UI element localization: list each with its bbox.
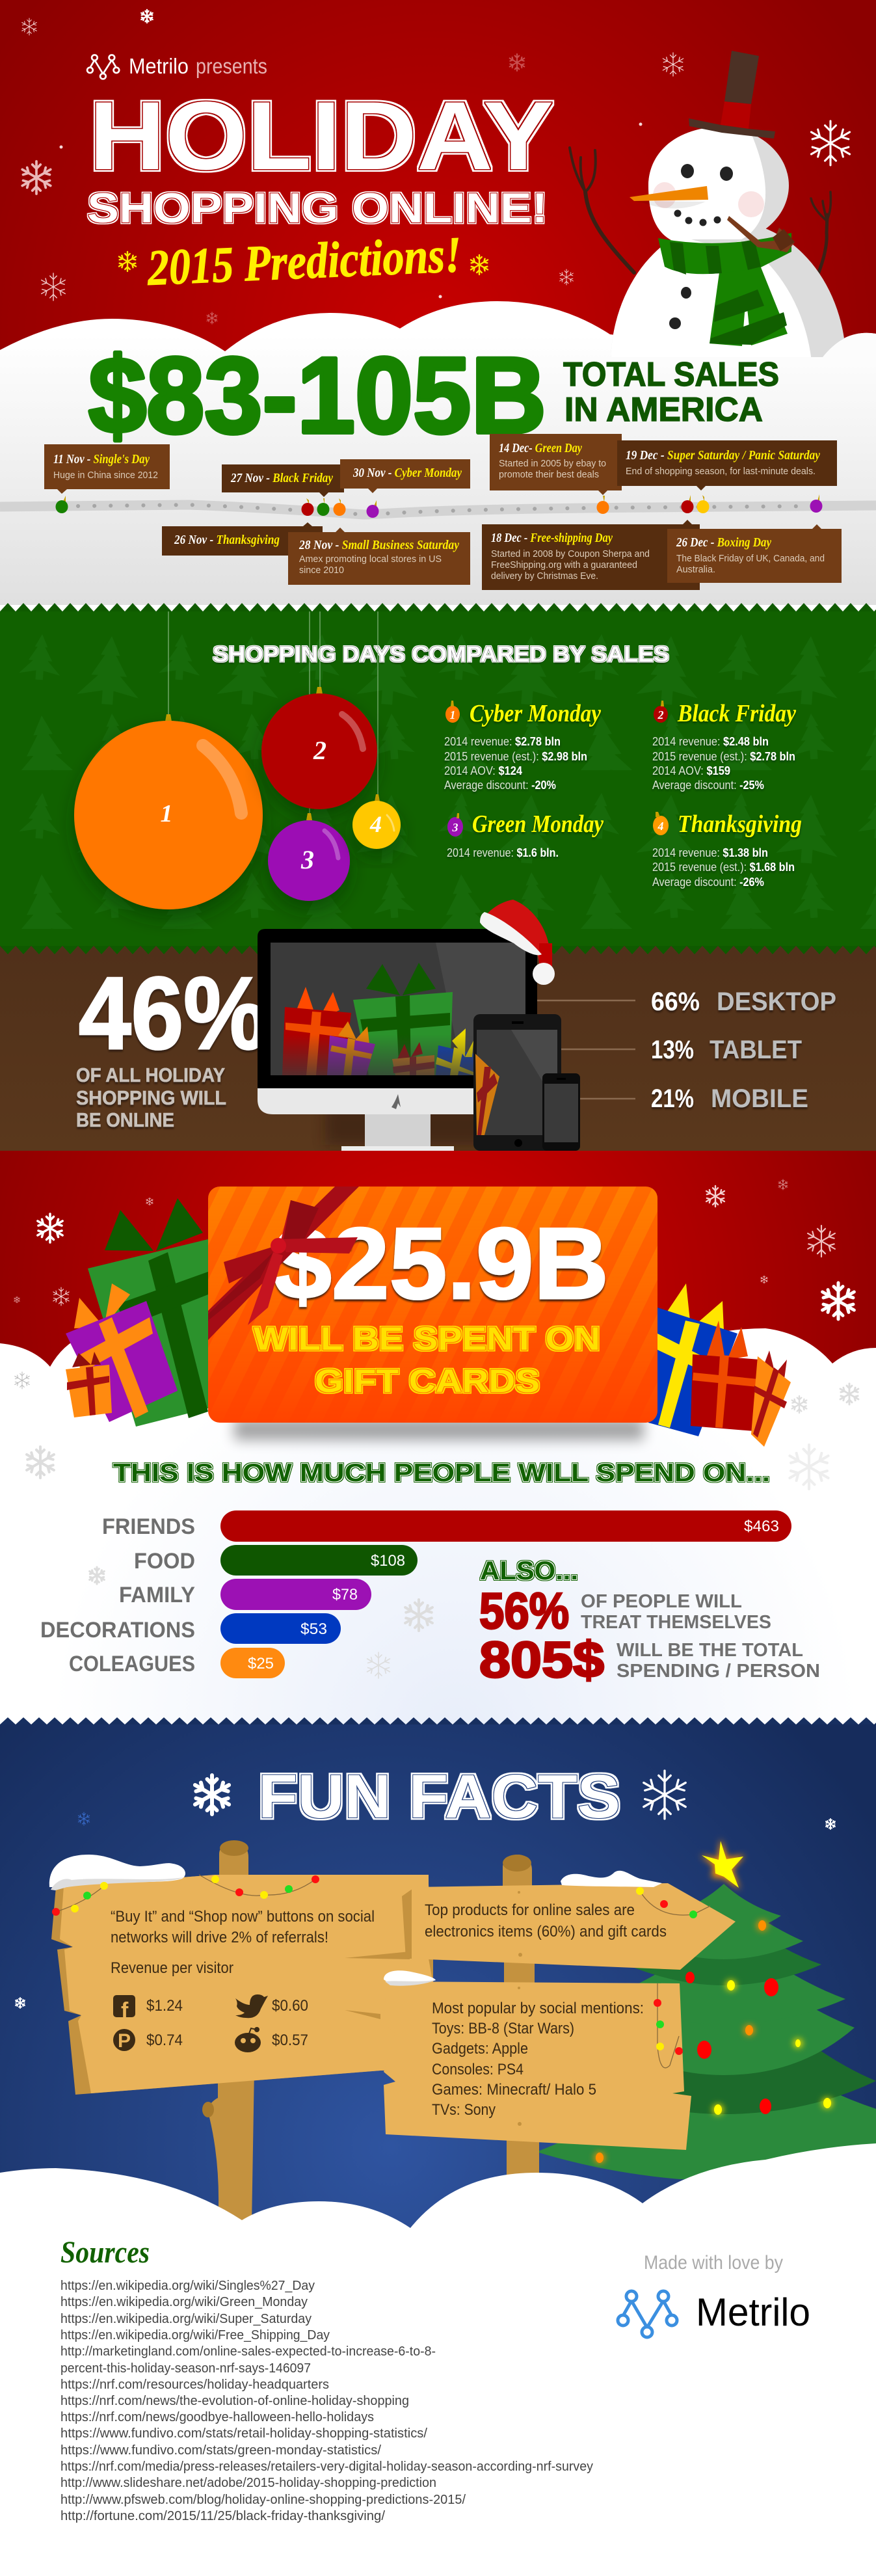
string lights on signs <box>52 1875 710 2068</box>
stat caption: of all holiday shopping will be online <box>76 1064 226 1131</box>
sign: most popular by social mentions: Gadgets: Apple <box>432 2040 528 2058</box>
callout: also 56% and 805$: 56% <box>479 1582 569 1639</box>
sign: social buttons: networks will drive 2% of referrals! <box>111 1929 328 1946</box>
sources list: https://en.wikipedia.org/wiki/Free_Shipping_Day <box>60 2328 330 2342</box>
headline: will be spent on gift cards: WILL BE SPENT ON <box>254 1321 600 1357</box>
callout: 11 Nov Single's Day <box>44 444 170 494</box>
sources list <box>60 2279 593 2523</box>
headline: total sales in America <box>563 356 779 429</box>
background: white spending section with snow <box>0 1328 876 1730</box>
callout: also 56% and 805$: WILL BE THE TOTAL <box>617 1640 803 1661</box>
legend: Black Friday: 2014 AOV: $159 <box>652 764 730 777</box>
ornament 4 <box>352 794 401 849</box>
sources list: https://www.fundivo.com/stats/retail-holiday-shopping-statistics/ <box>60 2426 427 2441</box>
callout: 14 Dec Green Day: 14 Dec- Green Day <box>499 441 582 455</box>
bar chart: spending per category: $25 <box>248 1655 274 1672</box>
callout: 27 Nov Black Friday: 27 Nov - Black Friday <box>230 471 333 485</box>
stat: 46%: 46% <box>79 956 267 1071</box>
legend: Black Friday: Average discount: -25% <box>652 779 764 792</box>
sources list: https://en.wikipedia.org/wiki/Super_Saturday <box>60 2312 312 2326</box>
logo: Metrilo presents: presents <box>196 54 267 78</box>
legend: Black Friday: 2 <box>657 708 663 721</box>
legend: Cyber Monday: 1 <box>450 708 455 721</box>
sign: most popular by social mentions: Toys: BB-8 (Star Wars) <box>432 2020 574 2037</box>
legend: Cyber Monday <box>444 700 601 792</box>
gifts: left stack <box>66 1198 208 1427</box>
legend: Black Friday: Black Friday <box>677 700 796 727</box>
callout: 26 Nov Thanksgiving: 26 Nov - Thanksgiving <box>174 533 280 547</box>
sign: most popular by social mentions <box>384 1981 691 2150</box>
sign: most popular by social mentions: TVs: Sony <box>432 2101 496 2119</box>
legend: Thanksgiving <box>652 811 802 889</box>
sign: social buttons: $1.24 <box>146 1997 183 2015</box>
legend: Green Monday: Green Monday <box>472 811 604 838</box>
sign: social buttons: $0.57 <box>272 2032 308 2049</box>
stat caption: of all holiday shopping will be online: OF ALL HOLIDAY <box>76 1064 225 1086</box>
device share: 66% desktop: 66% <box>651 987 700 1016</box>
device share: 21% mobile: MOBILE <box>711 1084 808 1113</box>
sign: most popular by social mentions: Games: Minecraft/ Halo 5 <box>432 2081 596 2099</box>
sources list: http://www.pfsweb.com/blog/holiday-online-shopping-predictions-2015/ <box>60 2493 466 2507</box>
sign: social buttons: “Buy It” and “Shop now” buttons on social <box>111 1908 375 1925</box>
gifts: right stack <box>648 1283 791 1447</box>
sources list: https://nrf.com/resources/holiday-headquarters <box>60 2378 329 2392</box>
callout: 30 Nov Cyber Monday: 30 Nov - Cyber Monday <box>352 466 462 480</box>
bar chart: spending per category: FRIENDS <box>102 1514 195 1539</box>
sources list: http://www.slideshare.net/adobe/2015-holiday-shopping-prediction <box>60 2476 436 2490</box>
bar chart: spending per category: FAMILY <box>119 1583 195 1607</box>
bar chart: spending per category: $108 <box>371 1552 405 1570</box>
background: brown devices section <box>0 946 876 1151</box>
headline: will be spent on gift cards: GIFT CARDS <box>315 1363 540 1399</box>
ornament 1: 1 <box>160 800 173 827</box>
legend: Green Monday <box>447 811 604 859</box>
background: green ornaments section <box>0 603 876 954</box>
device share: 66% desktop: DESKTOP <box>717 987 836 1016</box>
tree lights <box>594 1920 832 2163</box>
sign: social buttons <box>51 1875 433 2095</box>
callout: 26 Dec Boxing Day: The Black Friday of UK, Canada, and <box>676 553 825 564</box>
device share: 21% mobile <box>651 1084 808 1113</box>
background: fun facts blue section <box>0 1717 876 2245</box>
title: SHOPPING ONLINE!: SHOPPING ONLINE! <box>87 184 548 232</box>
santa hat <box>480 900 555 985</box>
legend: Green Monday: 2014 revenue: $1.6 bln. <box>447 846 559 859</box>
callout: 18 Dec Free-shipping Day: FreeShipping.org with a guaranteed <box>491 559 637 570</box>
gift card panel <box>208 1187 657 1440</box>
sign: social buttons: $0.60 <box>272 1997 308 2015</box>
snowflakes: spending section <box>27 1445 829 1678</box>
callout: 30 Nov Cyber Monday <box>340 459 470 493</box>
device share: 13% tablet: 13% <box>651 1036 694 1064</box>
section title: this is how much people will spend on: THIS IS HOW MUCH PEOPLE WILL SPEND ON... <box>113 1459 770 1487</box>
device share: 66% desktop <box>651 987 836 1016</box>
legend: Cyber Monday: 2015 revenue (est.): $2.98 bln <box>444 750 587 763</box>
ornament 1 <box>74 714 263 909</box>
callout: 11 Nov Single's Day: Huge in China since 2012 <box>53 470 158 481</box>
callout: 26 Dec Boxing Day <box>667 524 842 583</box>
bar chart: spending per category: DECORATIONS <box>40 1618 195 1643</box>
tablet <box>473 1014 561 1151</box>
ornament 3: 3 <box>300 845 314 874</box>
logo: Metrilo presents <box>87 54 267 79</box>
sources list: http://fortune.com/2015/11/25/black-friday-thanksgiving/ <box>60 2509 385 2523</box>
background: timeline white section with snow drifts <box>0 301 876 605</box>
legend: Cyber Monday: 2014 AOV: $124 <box>444 764 522 777</box>
legend: Cyber Monday: 2014 revenue: $2.78 bln <box>444 735 561 748</box>
callout: 19 Dec Super Saturday <box>617 440 837 490</box>
section title: shopping days compared by sales: SHOPPING DAYS COMPARED BY SALES <box>213 642 669 667</box>
callout: also 56% and 805$: OF PEOPLE WILL <box>581 1591 742 1612</box>
callout: 28 Nov Small Business Saturday: since 2010 <box>299 565 344 576</box>
sources list: https://www.fundivo.com/stats/green-monday-statistics/ <box>60 2443 381 2458</box>
snowflakes: hero <box>22 10 850 324</box>
logo: Metrilo presents: Metrilo <box>129 54 189 78</box>
callout: 18 Dec Free-shipping Day: Started in 2008 by Coupon Sherpa and <box>491 548 650 559</box>
sign: social buttons: P <box>118 2030 131 2052</box>
callout: 27 Nov Black Friday <box>222 464 344 497</box>
ornament 3 <box>268 813 350 901</box>
legend: Thanksgiving: 2014 revenue: $1.38 bln <box>652 846 768 859</box>
stat caption: of all holiday shopping will be online: BE ONLINE <box>76 1108 174 1131</box>
christmas tree <box>537 1838 876 2179</box>
snow caps on signs <box>49 1855 662 1986</box>
sources list: https://nrf.com/news/goodbye-halloween-hello-holidays <box>60 2410 374 2424</box>
callout: 14 Dec Green Day: promote their best deals <box>499 469 599 480</box>
subtitle: 2015 Predictions!: 2015 Predictions! <box>146 226 462 296</box>
headline: $25.9B: $25.9B <box>274 1207 609 1321</box>
sign: top products arrow: electronics items (60%) and gift cards <box>425 1923 667 1940</box>
logo: Metrilo footer: Metrilo <box>696 2290 810 2334</box>
device share: 21% mobile: 21% <box>651 1084 694 1113</box>
legend: Thanksgiving: Average discount: -26% <box>652 876 764 889</box>
bar chart: spending per category <box>40 1510 791 1678</box>
callout: 18 Dec Free-shipping Day: delivery by Christmas Eve. <box>491 570 598 582</box>
sign: social buttons: $0.74 <box>146 2032 183 2049</box>
callout: also 56% and 805$: ALSO... <box>480 1557 578 1585</box>
section title: fun facts: FUN FACTS <box>258 1762 620 1831</box>
title: HOLIDAY: HOLIDAY <box>89 81 553 190</box>
made with love by: Made with love by <box>644 2252 783 2274</box>
ribbon bow on gift card <box>208 1187 359 1340</box>
callout: 28 Nov Small Business Saturday <box>288 528 470 585</box>
headline: $83-105B: $83-105B <box>88 336 546 456</box>
sign: most popular by social mentions: Most popular by social mentions: <box>432 2000 644 2017</box>
legend: Black Friday: 2015 revenue (est.): $2.78 bln <box>652 750 795 763</box>
snowflakes: blue section <box>16 1812 835 2008</box>
timeline band <box>0 505 876 515</box>
callout: 14 Dec Green Day: Started in 2005 by ebay to <box>499 458 606 469</box>
bar chart: spending per category: $53 <box>300 1620 327 1638</box>
callout: 26 Dec Boxing Day: Australia. <box>676 564 715 575</box>
callout: also 56% and 805$ <box>479 1557 820 1688</box>
snowflakes: gift section <box>14 1179 858 1413</box>
legend: Thanksgiving: 4 <box>657 820 663 833</box>
sign: top products arrow: Top products for online sales are <box>425 1901 635 1919</box>
headline: total sales in America: TOTAL SALES <box>563 356 779 394</box>
callout: 14 Dec Green Day <box>490 434 622 495</box>
sources heading: Sources <box>60 2235 150 2270</box>
monitor <box>258 929 537 1151</box>
bar chart: spending per category: FOOD <box>134 1549 195 1574</box>
callout: 18 Dec Free-shipping Day <box>482 520 700 590</box>
sources list: http://marketingland.com/online-sales-expected-to-increase-6-to-8- <box>60 2344 436 2359</box>
callout: 28 Nov Small Business Saturday: Amex promoting local stores in US <box>299 554 442 565</box>
signpost posts <box>202 1840 539 2225</box>
callout: 19 Dec Super Saturday: 19 Dec - Super Saturday / Panic Saturday <box>626 448 820 463</box>
logo: Metrilo footer <box>618 2290 810 2337</box>
callout: 11 Nov Single's Day: 11 Nov - Single's Day <box>53 452 150 466</box>
ornament 4: 4 <box>369 811 382 837</box>
sources list: https://nrf.com/media/press-releases/retailers-very-digital-holiday-season-according-nrf-survey <box>60 2460 593 2474</box>
sources list: percent-this-holiday-season-nrf-says-146097 <box>60 2361 311 2376</box>
legend: Thanksgiving: Thanksgiving <box>678 811 802 838</box>
phone <box>542 1073 580 1151</box>
callout: also 56% and 805$: SPENDING / PERSON <box>617 1661 820 1682</box>
background: gift card red section <box>0 1151 876 1378</box>
sources list: https://en.wikipedia.org/wiki/Singles%27_Day <box>60 2279 315 2293</box>
legend: Black Friday: 2014 revenue: $2.48 bln <box>652 735 769 748</box>
legend: Thanksgiving: 2015 revenue (est.): $1.68 bln <box>652 861 795 874</box>
timeline ornaments <box>56 494 822 518</box>
ornament 2 <box>261 687 377 809</box>
callout: 26 Nov Thanksgiving <box>162 522 323 556</box>
background: hero red <box>0 0 876 416</box>
sign: top products arrow <box>402 1883 736 1970</box>
device share: 13% tablet: TABLET <box>710 1036 802 1064</box>
bar chart: spending per category: COLEAGUES <box>69 1652 195 1676</box>
legend: Black Friday <box>652 700 796 792</box>
callout: 26 Dec Boxing Day: 26 Dec - Boxing Day <box>676 535 771 550</box>
sign: social buttons: f <box>121 1998 129 2023</box>
bar chart: spending per category: $463 <box>744 1518 779 1535</box>
sources list: https://en.wikipedia.org/wiki/Green_Monday <box>60 2295 308 2309</box>
sources list: https://nrf.com/news/the-evolution-of-online-holiday-shopping <box>60 2394 409 2408</box>
ornament strings <box>168 611 378 814</box>
stat caption: of all holiday shopping will be online: SHOPPING WILL <box>76 1086 226 1109</box>
device leader lines <box>537 1000 635 1099</box>
callout: 19 Dec Super Saturday: End of shopping season, for last-minute deals. <box>626 466 816 477</box>
headline: will be spent on gift cards <box>254 1321 600 1399</box>
sign: social buttons: Revenue per visitor <box>111 1959 233 1977</box>
headline: total sales in America: IN AMERICA <box>564 391 763 429</box>
callout: 18 Dec Free-shipping Day: 18 Dec - Free-shipping Day <box>491 531 613 545</box>
callout: 28 Nov Small Business Saturday: 28 Nov - Small Business Saturday <box>299 538 459 552</box>
legend: Cyber Monday: Average discount: -20% <box>444 779 556 792</box>
callout: also 56% and 805$: TREAT THEMSELVES <box>581 1612 771 1633</box>
device share: 13% tablet <box>651 1036 802 1064</box>
background: white footer with snow drifts <box>0 2143 876 2576</box>
legend: Cyber Monday: Cyber Monday <box>470 700 601 727</box>
legend: Green Monday: 3 <box>451 821 458 834</box>
sign: most popular by social mentions: Consoles: PS4 <box>432 2061 524 2078</box>
bar chart: spending per category: $78 <box>332 1586 358 1603</box>
ornament 2: 2 <box>313 736 326 765</box>
callout: also 56% and 805$: 805$ <box>479 1631 604 1688</box>
snowman <box>568 51 876 357</box>
